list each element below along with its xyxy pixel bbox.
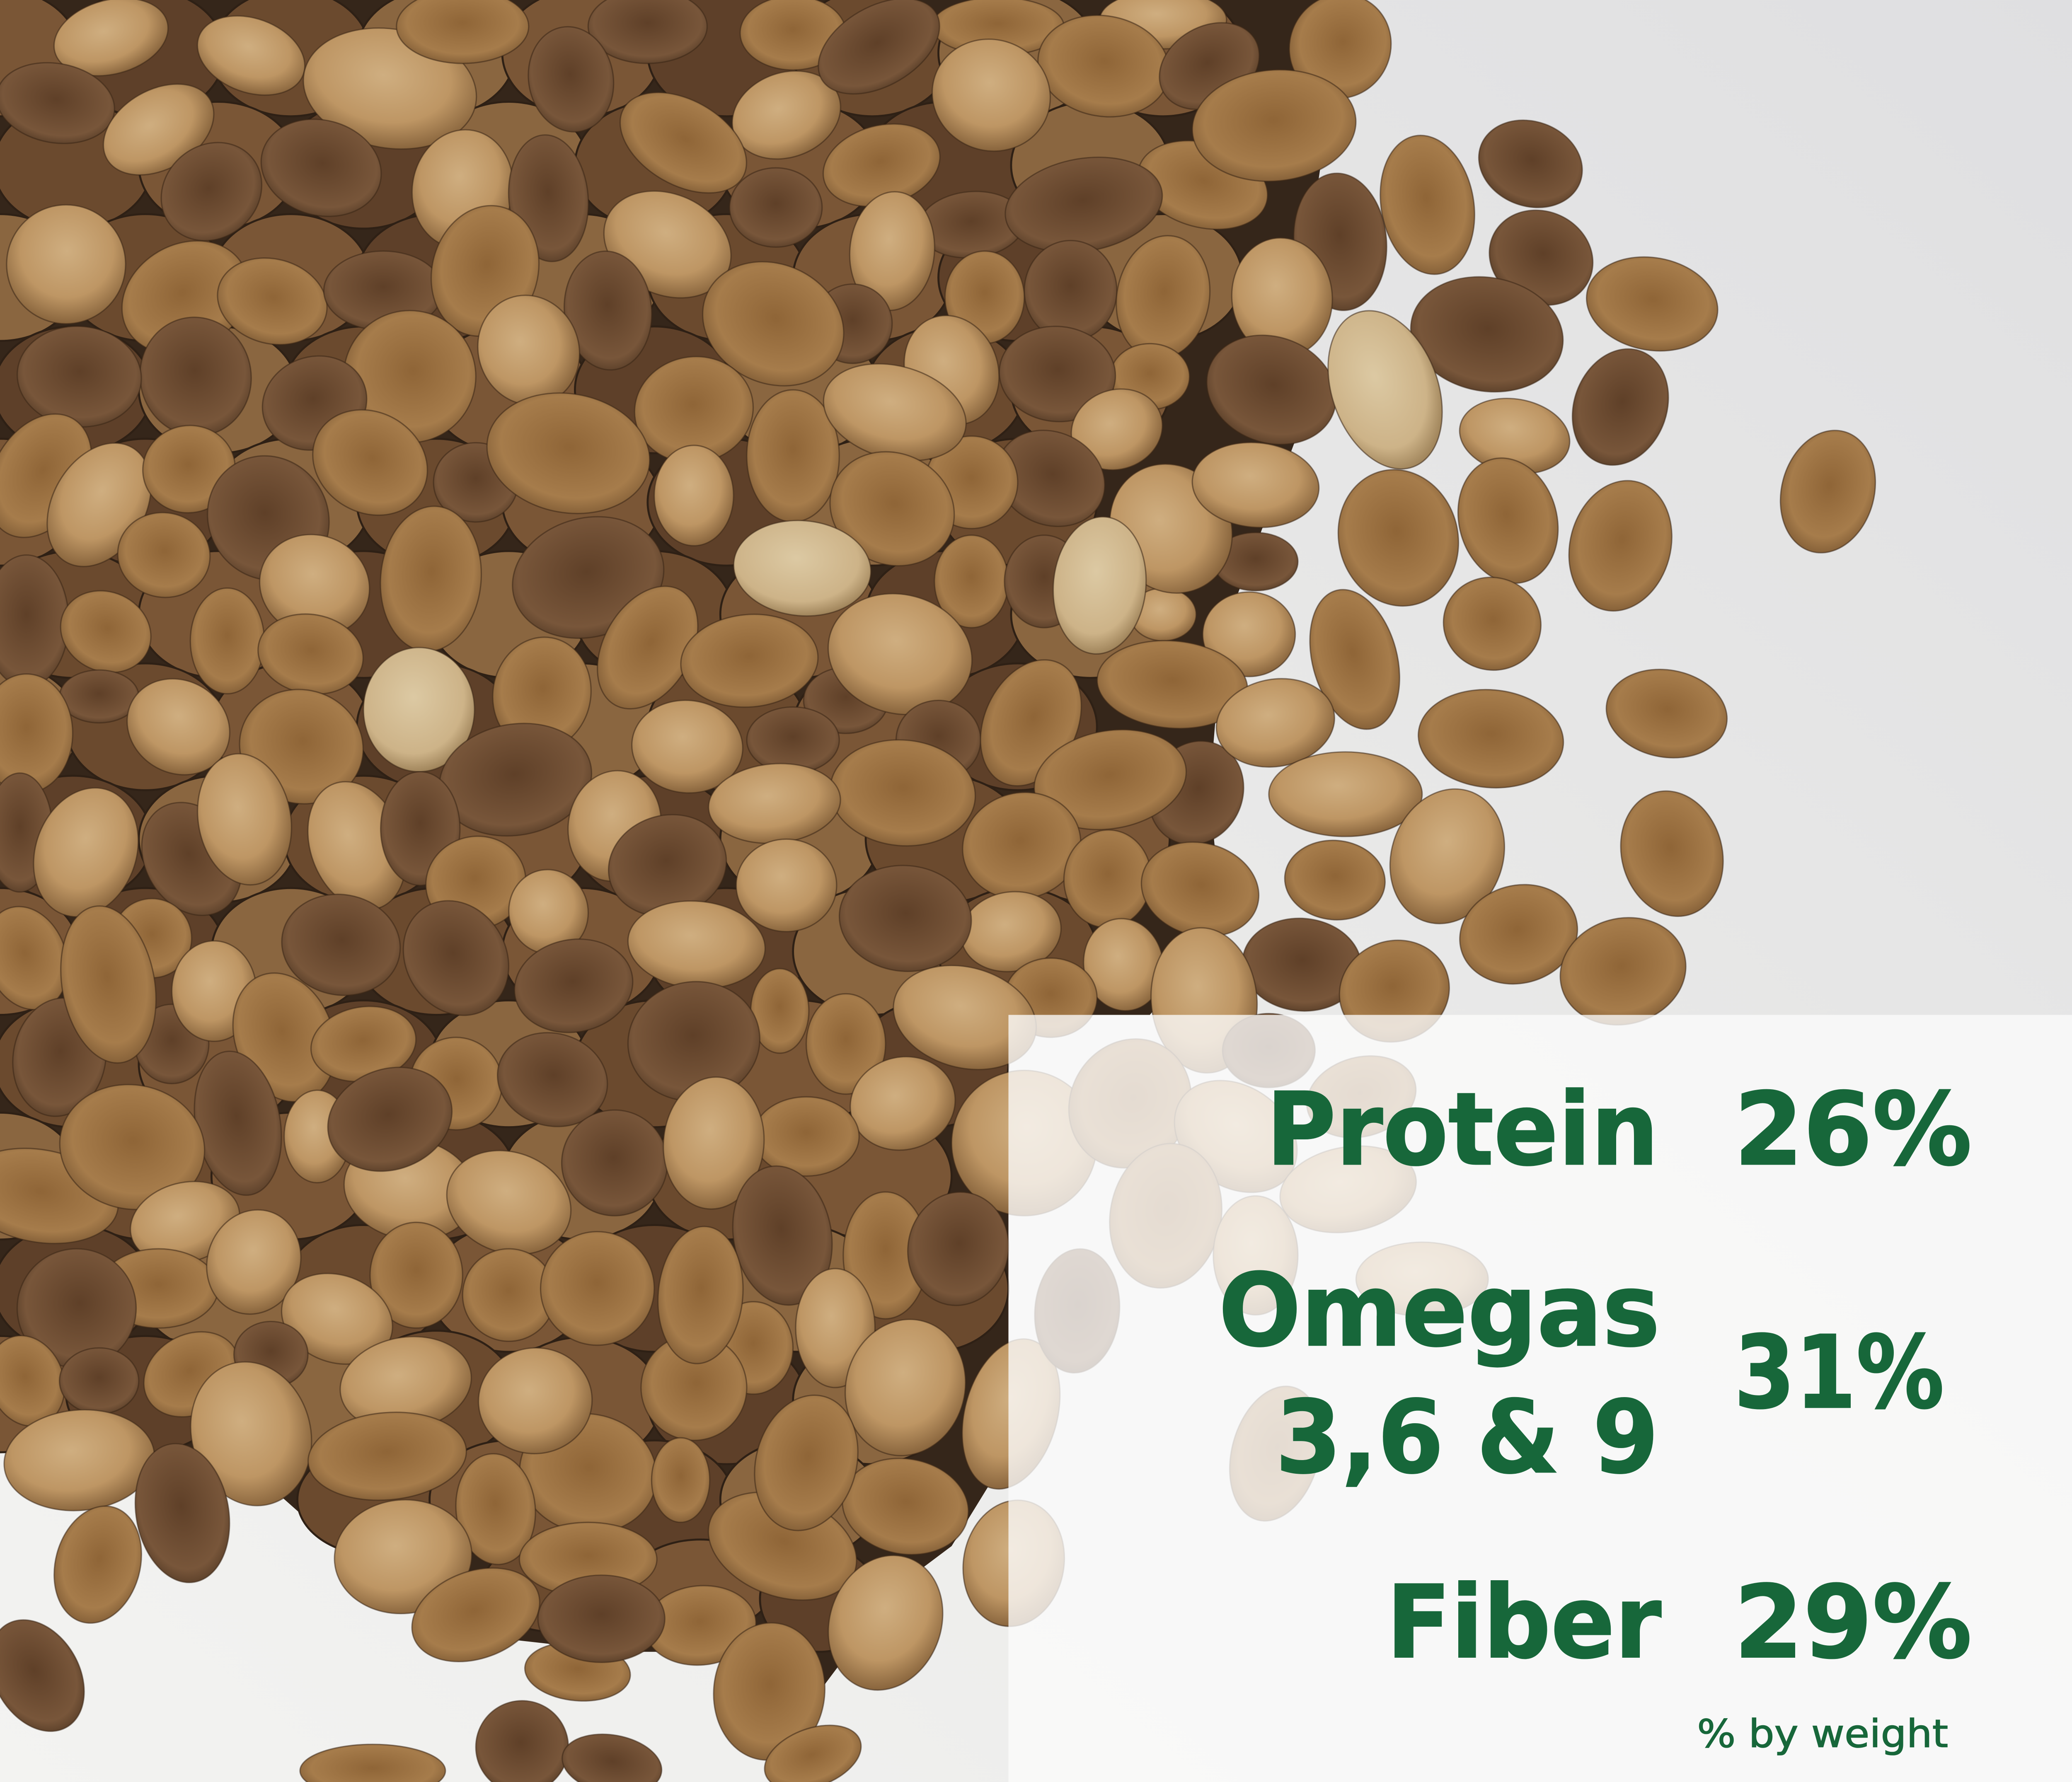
stats text <box>1219 1071 1972 1756</box>
stat: fiber: 29% <box>1734 1564 1972 1681</box>
stat: omegas: 3,6 & 9 <box>1276 1379 1659 1496</box>
stat: protein: Protein <box>1266 1071 1659 1188</box>
stat: protein: 26% <box>1734 1071 1972 1188</box>
stat: omegas <box>1219 1252 1944 1496</box>
seed pile shadow base <box>0 0 1322 1691</box>
stat: fiber <box>1387 1564 1972 1681</box>
filler seeds behind the pile <box>0 0 1242 1652</box>
stat: omegas: 31% <box>1734 1315 1944 1431</box>
stat: protein <box>1266 1071 1972 1188</box>
stat: omegas: Omegas <box>1219 1252 1660 1369</box>
stat: fiber: Fiber <box>1387 1564 1661 1681</box>
footnote: % by weight <box>1697 1711 1948 1756</box>
translucent white stats panel <box>1009 1015 2072 1782</box>
